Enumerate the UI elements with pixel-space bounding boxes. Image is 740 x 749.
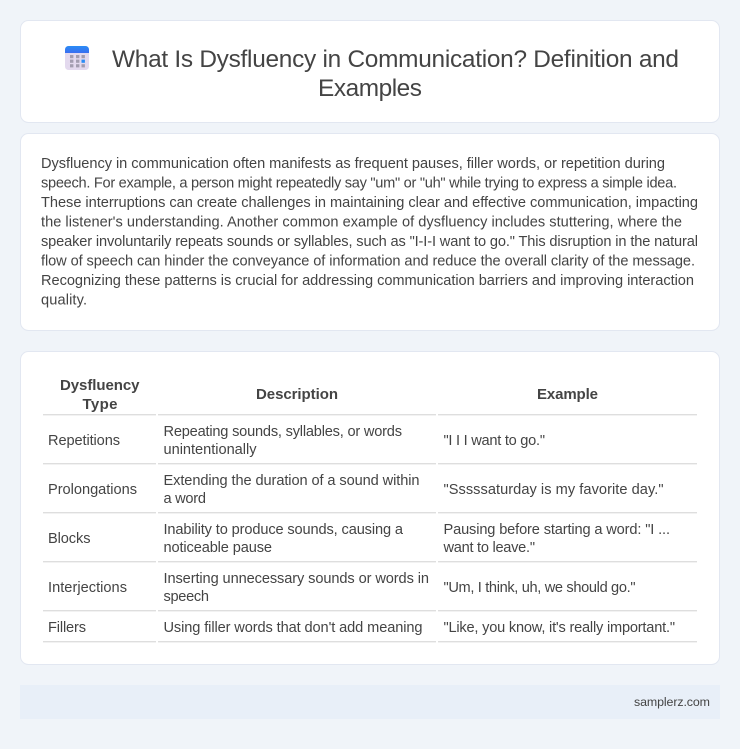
panel: definition paragraph — [20, 134, 720, 330]
panel: header — [20, 20, 720, 122]
table row: interjections — [48, 571, 636, 605]
table row: blocks: Inability to produce sounds, causing a — [164, 522, 404, 538]
table row: repetitions: unintentionally — [164, 442, 257, 458]
footer credit: samplerz.com — [634, 695, 710, 709]
table row: fillers: Fillers — [48, 620, 86, 636]
text block: paragraph: These interruptions can create challenges in maintaining clear and effective communication, impacting — [41, 195, 698, 211]
table row: repetitions: "I I I want to go." — [444, 433, 545, 449]
table row: repetitions — [48, 424, 545, 458]
table row: blocks: Blocks — [48, 531, 90, 547]
table row: fillers: "Like, you know, it's really important." — [444, 620, 675, 636]
text block: paragraph: the listener's understanding. Another common example of dysfluency includes stuttering, where the — [41, 214, 682, 230]
table row: repetitions: Repeating sounds, syllables, or words — [164, 424, 402, 440]
table header: Type — [82, 396, 118, 413]
table row: prolongations: "Sssssaturday is my favorite day." — [444, 482, 664, 498]
table row: blocks: want to leave." — [442, 540, 535, 556]
table row: prolongations: a word — [164, 491, 206, 507]
table row: blocks: noticeable pause — [164, 540, 272, 556]
table row: interjections: Interjections — [48, 580, 127, 596]
panel: dysfluency table — [20, 352, 720, 664]
table row: interjections: Inserting unnecessary sounds or words in — [164, 571, 429, 587]
text block: paragraph: Dysfluency in communication often manifests as frequent pauses, filler words, or repetition during — [41, 156, 665, 172]
text block: paragraph: Recognizing these patterns is crucial for addressing communication barriers and improving interaction — [41, 273, 694, 289]
text block: paragraph: flow of speech can hinder the conveyance of information and reduce the overall clarity of the message. — [41, 254, 695, 270]
icon: calendar — [65, 46, 89, 70]
title: Examples — [318, 75, 422, 102]
text block: paragraph: speech. For example, a person might repeatedly say "um" or "uh" while trying to express a simple idea. — [41, 176, 677, 192]
table row: fillers — [48, 620, 675, 636]
table row: fillers: Using filler words that don't add meaning — [164, 620, 422, 636]
text block: paragraph — [41, 156, 698, 308]
table row: blocks: Pausing before starting a word: "I ... — [444, 522, 670, 538]
table header: Example — [537, 386, 598, 403]
title — [112, 46, 679, 102]
table header: Description — [256, 386, 338, 403]
text block: paragraph: speaker involuntarily repeats sounds or syllables, such as "I-I-I want to go." This disruption in the natural — [41, 234, 698, 250]
table row: blocks — [48, 522, 670, 556]
table row: interjections: "Um, I think, uh, we should go." — [444, 580, 636, 596]
table row: prolongations: Prolongations — [48, 482, 137, 498]
table row: interjections: speech — [164, 589, 209, 605]
footer — [20, 685, 720, 719]
table row: prolongations — [48, 473, 664, 507]
table row: prolongations: Extending the duration of a sound within — [164, 473, 420, 489]
table header — [60, 377, 598, 413]
title: What Is Dysfluency in Communication? Definition and — [112, 46, 679, 73]
text block: paragraph: quality. — [41, 292, 87, 308]
table header: Dysfluency — [60, 377, 140, 394]
table row: repetitions: Repetitions — [48, 433, 120, 449]
